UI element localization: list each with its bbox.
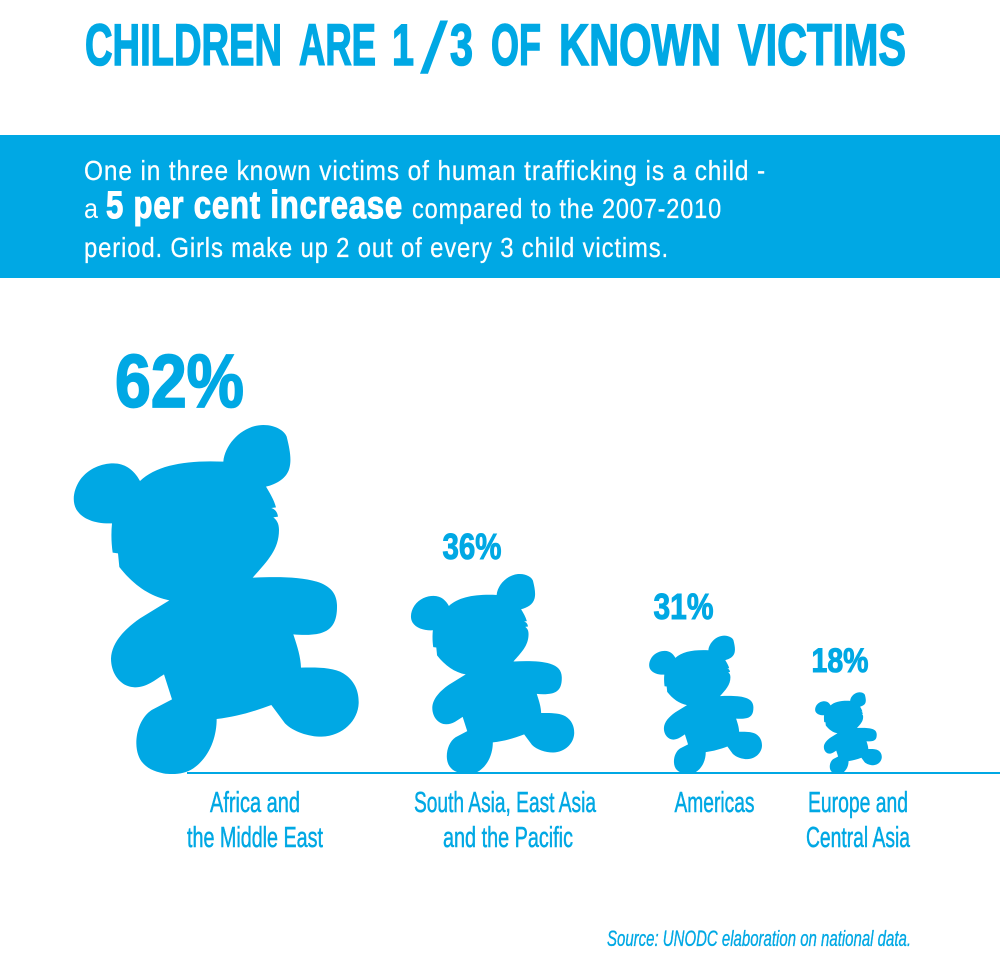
value: Europe 18%: 18% xyxy=(812,642,868,680)
label: Europe and Central Asia: Central Asia xyxy=(806,822,911,854)
label: South Asia, East Asia and the Pacific xyxy=(414,787,597,854)
panel: summary banner xyxy=(0,135,1000,278)
label: South Asia, East Asia and the Pacific: and the Pacific xyxy=(443,822,573,854)
title: 1 xyxy=(392,13,414,78)
label: Americas: Americas xyxy=(674,787,754,819)
title: / xyxy=(420,9,448,89)
value: Americas 31%: 31% xyxy=(654,586,714,627)
title: 3 xyxy=(450,13,473,78)
title: CHILDREN xyxy=(85,13,282,78)
banner text line 2: 5 per cent increase xyxy=(106,184,403,227)
banner text line 2: a xyxy=(84,193,98,224)
icon: small teddy bear xyxy=(649,636,762,774)
label: Europe and Central Asia: Europe and xyxy=(808,787,908,819)
title: ARE xyxy=(299,13,376,78)
banner text line 2: compared to the 2007-2010 xyxy=(412,193,722,224)
baseline axis xyxy=(187,772,1000,774)
label: Africa and the Middle East: Africa and xyxy=(210,787,300,819)
icon: large teddy bear xyxy=(74,425,359,774)
title: KNOWN xyxy=(559,13,721,78)
banner text line 3: period. Girls make up 2 out of every 3 child victims. xyxy=(84,232,669,263)
banner text line 2 xyxy=(84,184,722,227)
icon: smallest teddy bear xyxy=(815,692,882,774)
label: South Asia, East Asia and the Pacific: South Asia, East Asia xyxy=(414,787,597,819)
value: South Asia 36%: 36% xyxy=(442,526,502,567)
title: VICTIMS xyxy=(738,13,906,78)
icon: medium teddy bear xyxy=(411,574,574,774)
title: OF xyxy=(491,13,541,78)
label: Africa and the Middle East xyxy=(187,787,323,854)
value: Africa and the Middle East 62%: 62% xyxy=(115,339,244,423)
banner text line 1: One in three known victims of human trafficking is a child - xyxy=(84,155,766,186)
label: Africa and the Middle East: the Middle East xyxy=(187,822,323,854)
label: Europe and Central Asia xyxy=(806,787,911,854)
title xyxy=(85,9,906,89)
